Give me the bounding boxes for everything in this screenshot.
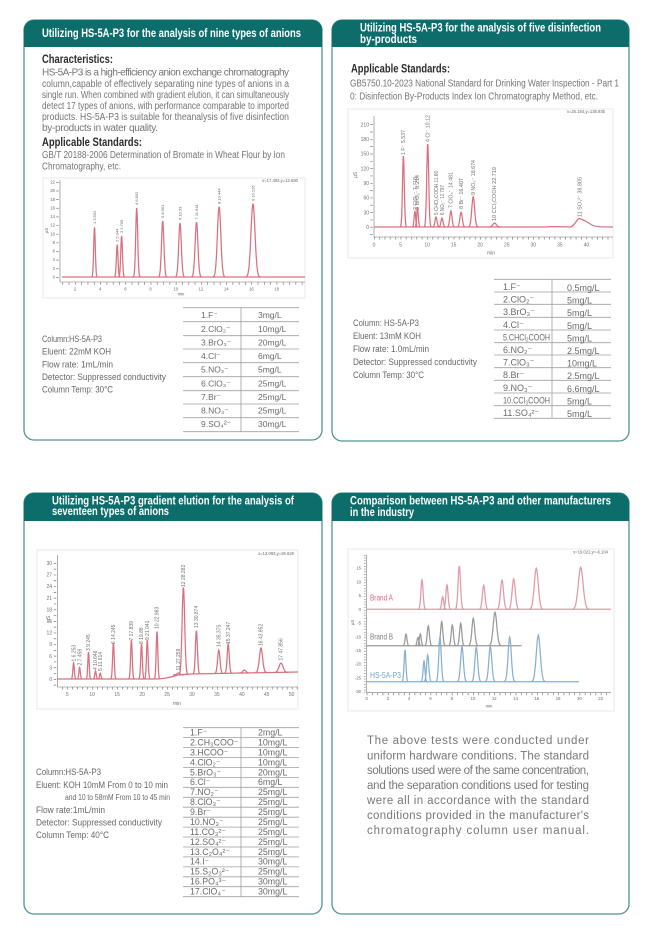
panel: manufacturer comparison	[332, 493, 629, 914]
table: seventeen anion concentrations: 10.NO₃⁻	[190, 817, 224, 827]
table: by-product concentrations: 8.Br⁻	[503, 370, 525, 380]
legend label: Brand A: Brand A	[370, 594, 394, 602]
text block: test conditions note: conditions provided in the manufacturer's	[367, 810, 589, 822]
table: seventeen anion concentrations: 10mg/L	[258, 747, 287, 757]
chart: seventeen anion chromatogram: 9 21.041	[145, 620, 151, 640]
text block: test conditions: Flow rate: 1.0mL/min	[353, 344, 429, 355]
table: seventeen anion concentrations: 6mg/L	[258, 777, 283, 787]
table: seventeen anion concentrations: 6.Cl⁻	[190, 777, 211, 787]
chart: disinfection by-product chromatogram: 0	[366, 225, 369, 231]
chart: disinfection by-product chromatogram: 15	[451, 242, 457, 248]
chart: seventeen anion chromatogram: 3 9.245	[86, 634, 92, 651]
chart: seventeen anion chromatogram: 12	[46, 631, 52, 637]
chart: brand comparison chromatograms: 2	[387, 696, 390, 701]
chart: seventeen anion chromatogram: 27	[46, 573, 52, 579]
chart: nine anion chromatogram: 3 5.709	[119, 219, 124, 233]
chart: brand comparison chromatograms: 20	[577, 696, 582, 701]
chart: disinfection by-product chromatogram: 20	[477, 242, 483, 248]
chart: brand comparison chromatograms: -25	[355, 676, 362, 680]
table: seventeen anion concentrations: 1.F⁻	[190, 728, 208, 738]
text block: characteristics description: by-products in water quality.	[42, 123, 158, 134]
panel header: gradient elution: Utilizing HS-5A-P3 gradient elution for the analysis of	[52, 496, 294, 508]
text block: test conditions note	[366, 735, 589, 837]
table: anion concentrations: 20mg/L	[258, 338, 287, 348]
chart: seventeen anion chromatogram: 10 22.983	[155, 607, 161, 629]
table: seventeen anion concentrations: 2.CH₃COO⁻	[190, 737, 239, 747]
text block: test conditions: Eluent: KOH 10mM From 0 to 10 min	[36, 780, 168, 791]
chart: disinfection by-product chromatogram	[348, 109, 613, 258]
table: seventeen anion concentrations: 30mg/L	[258, 877, 287, 887]
chart: disinfection by-product chromatogram: 10	[424, 242, 430, 248]
table: by-product concentrations: 5.CHCl₂COOH	[503, 332, 550, 342]
chart: nine anion chromatogram: 2	[74, 286, 77, 292]
chart: seventeen anion chromatogram: 18	[46, 607, 52, 613]
chart: disinfection by-product chromatogram: 7 ClO₃⁻ 14.481	[448, 172, 454, 208]
table: seventeen anion concentrations: 25mg/L	[258, 867, 287, 877]
text block: characteristics description: single run. When combined with gradient elution, it can simultaneously	[42, 90, 289, 101]
table: seventeen anion concentrations: 11.CO₃²⁻	[190, 827, 226, 837]
panel header: disinfection by-products: by-products	[360, 34, 417, 46]
panel header: gradient elution: seventeen types of anions	[52, 506, 169, 518]
chart: nine anion chromatogram: 10	[50, 231, 56, 236]
chart: nine anion chromatogram: 18	[274, 286, 280, 292]
chart: nine anion chromatogram: 8	[149, 286, 152, 292]
text block: standard reference	[350, 78, 619, 102]
chart: nine anion chromatogram: 8	[53, 240, 56, 245]
chart: disinfection by-product chromatogram: 90	[363, 181, 369, 187]
chart: brand comparison chromatograms: 18	[556, 696, 561, 701]
chart: brand comparison chromatograms: -30	[355, 689, 362, 694]
table: seventeen anion concentrations: 17.ClO₄⁻	[190, 887, 226, 897]
table: seventeen anion concentrations: 25mg/L	[258, 787, 287, 797]
chart: nine anion chromatogram: 12	[199, 286, 204, 292]
chart: disinfection by-product chromatogram: 5 CHCl₂COOH 11.66	[434, 171, 440, 215]
chart: seventeen anion chromatogram: 3	[49, 665, 52, 671]
table: seventeen anion concentrations: 15.S₂O₃²⁻	[190, 867, 230, 877]
panel header: gradient elution	[24, 493, 322, 521]
text block: test conditions: Eluent: 13mM KOH	[353, 331, 421, 342]
table: by-product concentrations: 5mg/L	[567, 321, 592, 331]
table: seventeen anion concentrations: 12.SO₄²⁻	[190, 837, 226, 847]
chart: brand comparison chromatograms: 22	[598, 696, 604, 701]
table: seventeen anion concentrations: 25mg/L	[258, 807, 287, 817]
text block: characteristics description: column,capable of effectively separating nine types of anions in a	[42, 79, 289, 90]
chart: seventeen anion chromatogram: 24	[46, 584, 52, 590]
text block: test conditions: Column Temp: 30°C	[353, 370, 424, 381]
table: seventeen anion concentrations: 14.I⁻	[190, 857, 210, 867]
table: by-product concentrations: 10mg/L	[567, 358, 597, 368]
chart: brand comparison chromatograms: µS	[350, 620, 355, 625]
chart: disinfection by-product chromatogram: 35	[557, 242, 563, 248]
table: anion concentrations: 25mg/L	[258, 406, 287, 416]
chart: disinfection by-product chromatogram: 60	[363, 196, 369, 202]
table: anion concentrations: 9.SO₄²⁻	[201, 419, 231, 429]
chart: disinfection by-product chromatogram: 180	[361, 137, 369, 143]
chart: brand comparison chromatograms: 0	[366, 696, 369, 701]
text block: test conditions note: were all in accordance with the standard	[366, 795, 589, 807]
chart: brand comparison chromatograms	[348, 549, 614, 711]
chart: brand comparison chromatograms: 15	[356, 566, 362, 571]
chart: nine anion chromatogram: 5 8.961	[160, 204, 165, 218]
chart: disinfection by-product chromatogram: 30	[531, 242, 536, 248]
table: seventeen anion concentrations: 10mg/L	[258, 737, 287, 747]
heading: applicable standards: Applicable Standards:	[42, 137, 142, 149]
chart: seventeen anion chromatogram: 9	[49, 642, 52, 648]
chart: nine anion chromatogram: 12	[50, 223, 56, 228]
table: by-product concentrations: 5mg/L	[567, 334, 592, 344]
table: seventeen anion concentrations: 25mg/L	[258, 797, 287, 807]
chart: seventeen anion chromatogram: 4 10.646	[93, 650, 99, 670]
chart: disinfection by-product chromatogram: 150	[361, 152, 369, 158]
chart: nine anion chromatogram: 6	[124, 286, 127, 292]
chart: brand comparison chromatograms: -10	[355, 634, 362, 639]
chart: brand comparison chromatograms: 10	[471, 696, 476, 701]
chart: seventeen anion chromatogram: 6	[49, 654, 52, 660]
chart: seventeen anion chromatogram: 30	[189, 692, 195, 698]
chart: nine anion chromatogram: 22	[50, 180, 56, 184]
trace: Brand A	[367, 566, 611, 609]
chart: nine anion chromatogram: 4	[99, 286, 102, 292]
table: seventeen anion concentrations: 4.ClO₂⁻	[190, 757, 221, 767]
panel header: comparison: in the industry	[350, 507, 414, 519]
text block: test conditions note: The above tests were conducted under	[367, 735, 589, 747]
table: by-product concentrations: 4.Cl⁻	[503, 320, 524, 330]
chart: disinfection by-product chromatogram: 1 F⁻ 5.537	[401, 130, 407, 155]
table: seventeen anion concentrations: 7.NO₂⁻	[190, 787, 219, 797]
chart: nine anion chromatogram: µS	[44, 228, 49, 233]
chart: nine anion chromatogram: 6 10.33	[178, 206, 182, 220]
chart: seventeen anion chromatogram: 5 11.614	[98, 652, 104, 671]
table: by-product concentrations: 0.5mg/L	[567, 283, 600, 293]
text block: test conditions	[353, 318, 477, 381]
table: by-product concentrations: 11.SO₄²⁻	[503, 408, 540, 418]
panel header: disinfection by-products: Utilizing HS-5A-P3 for the analysis of five disinfection	[360, 22, 601, 34]
chart: seventeen anion chromatogram: 8 19.88	[139, 627, 145, 644]
text block: test conditions: Eluent: 22mM KOH	[42, 346, 111, 358]
text block: test conditions: Flow rate: 1mL/min	[42, 360, 113, 370]
text block: test conditions: Column: HS-5A-P3	[353, 318, 419, 329]
chart: brand comparison chromatograms: 4	[408, 696, 411, 701]
table: by-product concentrations: 3.BrO₃⁻	[503, 307, 535, 317]
chart: seventeen anion chromatogram: 15	[114, 692, 120, 698]
text block: test conditions: Detector: Suppressed conductivity	[353, 357, 477, 368]
table: anion concentrations: 4.Cl⁻	[201, 351, 221, 361]
text block: test conditions: Flow rate:1mL/min	[36, 805, 105, 816]
chart: brand comparison chromatograms: x=19.022,y=-6.104	[573, 550, 609, 554]
chart: seventeen anion chromatogram: min	[173, 701, 181, 707]
table: seventeen anion concentrations: 9.Br⁻	[190, 807, 211, 817]
text block: test conditions note: and the separation conditions used for testing	[367, 780, 589, 792]
chart: seventeen anion chromatogram: 13 30.874	[194, 606, 200, 628]
text block: test conditions: Column Temp: 30°C	[42, 384, 113, 396]
table: seventeen anion concentrations: 30mg/L	[258, 857, 287, 867]
panel header: nine anions	[24, 20, 322, 47]
chart: seventeen anion chromatogram: 15	[46, 619, 52, 625]
chart: nine anion chromatogram: 16	[50, 205, 56, 210]
legend label: HS-5A-P3: HS-5A-P3	[370, 671, 401, 680]
text block: test conditions: Detector: Suppressed conductivity	[36, 818, 162, 828]
trace: Brand B	[367, 612, 522, 646]
chart: seventeen anion chromatogram: 1 6.253	[71, 645, 77, 662]
table: anion concentrations: 2.ClO₂⁻	[201, 324, 231, 334]
table: anion concentrations: 1.F⁻	[201, 310, 218, 320]
table: seventeen anion concentrations: 3.HCOO⁻	[190, 747, 229, 757]
chart: nine anion chromatogram: 0	[53, 274, 56, 280]
text block: test conditions	[36, 767, 170, 841]
table: by-product concentrations: 10.CCl₃COOH	[503, 396, 550, 406]
trace: HS-5A-P3	[367, 635, 579, 682]
table: seventeen anion concentrations: 20mg/L	[258, 767, 287, 777]
chart: seventeen anion chromatogram: 5	[66, 692, 69, 698]
chart: disinfection by-product chromatogram: 120	[361, 166, 369, 172]
chart: seventeen anion chromatogram: 21	[46, 596, 52, 602]
chart: seventeen anion chromatogram: 30	[46, 561, 52, 567]
chart: brand comparison chromatograms: -5	[357, 620, 362, 626]
chart: nine anion chromatogram: 14	[224, 286, 229, 292]
table: by-product concentrations: 2.5mg/L	[567, 346, 600, 356]
chart: disinfection by-product chromatogram: min	[487, 250, 495, 256]
chart: disinfection by-product chromatogram: 6 NO₂⁻ 12.797	[440, 185, 446, 215]
chart: disinfection by-product chromatogram: 8 Br⁻ 16.407	[459, 178, 465, 209]
chart: disinfection by-product chromatogram: 40	[584, 242, 589, 248]
panel header: comparison	[332, 493, 629, 521]
chart: seventeen anion chromatogram: 25	[164, 692, 170, 698]
text block: standard reference: 0: Disinfection By-Products Index Ion Chromatography Method, etc.	[350, 92, 598, 102]
text block: test conditions: Column:HS-5A-P3	[42, 334, 102, 345]
chart: nine anion chromatogram: 8 13.444	[216, 188, 222, 204]
table: seventeen anion concentrations: 8.ClO₃⁻	[190, 797, 221, 807]
table: seventeen anion concentrations: 13.C₂O₄²⁻	[190, 847, 230, 857]
table: anion concentrations: 25mg/L	[258, 378, 287, 388]
table: seventeen anion concentrations: 25mg/L	[258, 837, 287, 847]
text block: test conditions note: chromatography column user manual.	[367, 825, 589, 837]
chart: disinfection by-product chromatogram: 0	[373, 242, 376, 248]
chart: seventeen anion chromatogram: 12 28.282	[181, 565, 187, 587]
table: by-product concentrations: 5mg/L	[567, 296, 592, 306]
table: by-product concentrations: 6.NO₂⁻	[503, 345, 532, 355]
chart: nine anion chromatogram: 18	[50, 197, 56, 202]
chart: seventeen anion chromatogram: 14 35.375	[216, 625, 222, 647]
text block: characteristics description: detect 17 types of anions, with performance comparable to imported	[42, 101, 289, 112]
chart: brand comparison chromatograms: -20	[355, 662, 362, 667]
chart: disinfection by-product chromatogram: 25	[504, 242, 510, 248]
chart: seventeen anion chromatogram	[37, 550, 298, 709]
table: by-product concentrations: 2.ClO₂⁻	[503, 294, 534, 304]
table: by-product concentrations: 2.5mg/L	[567, 371, 600, 381]
text block: characteristics description: HS-5A-P3 is a high-efficiency anion exchange chromatography	[42, 68, 289, 78]
chart: seventeen anion chromatogram: 2 7.459	[77, 649, 83, 666]
chart: seventeen anion chromatogram: 35	[214, 692, 220, 698]
chart: seventeen anion chromatogram: x=12.093,y=26.626	[258, 551, 295, 556]
chart: nine anion chromatogram: 6	[53, 249, 56, 254]
table: by-product concentrations: 6.6mg/L	[567, 384, 600, 394]
chart: brand comparison chromatograms: -15	[355, 648, 362, 653]
table: anion concentrations: 8.NO₃⁻	[201, 406, 229, 416]
text block: standard reference: GB/T 20188-2006 Determination of Bromate in Wheat Flour by Ion	[42, 150, 285, 161]
chart: seventeen anion chromatogram: 10	[89, 692, 95, 698]
table: by-product concentrations	[494, 279, 611, 419]
chart: nine anion chromatogram: 14	[50, 214, 56, 219]
legend label: Brand B: Brand B	[370, 632, 393, 642]
chart: nine anion chromatogram: 9 16.126	[250, 185, 256, 201]
text block: test conditions note: uniform hardware conditions. The standard	[367, 750, 589, 762]
text block: test conditions: Column:HS-5A-P3	[36, 767, 101, 778]
table: seventeen anion concentrations: 30mg/L	[258, 887, 287, 897]
text block: characteristics description	[42, 68, 289, 134]
table: anion concentrations: 3.BrO₃⁻	[201, 338, 231, 348]
chart: seventeen anion chromatogram: 40	[239, 692, 245, 698]
chart: seventeen anion chromatogram: 16 43.852	[259, 624, 265, 646]
panel: seventeen types of anions	[24, 493, 322, 914]
table: anion concentrations	[183, 308, 299, 432]
chart: disinfection by-product chromatogram: 10 CCl₃COOH 22.719	[492, 167, 498, 221]
chart: seventeen anion chromatogram: 0	[49, 677, 52, 683]
table: seventeen anion concentrations: 5.BrO₃⁻	[190, 767, 222, 777]
chart: nine anion chromatogram: 20	[50, 188, 56, 193]
table: anion concentrations: 30mg/L	[258, 419, 287, 429]
table: by-product concentrations: 5mg/L	[567, 396, 592, 406]
chart: brand comparison chromatograms: 12	[492, 696, 497, 701]
chart: nine anion chromatogram: 4	[53, 257, 56, 262]
chart: nine anion chromatogram	[43, 178, 305, 298]
chart: nine anion chromatogram: min	[178, 292, 185, 296]
table: anion concentrations: 10mg/L	[258, 324, 287, 334]
chart: brand comparison chromatograms: 8	[451, 696, 454, 701]
chart: disinfection by-product chromatogram: x=25.154,y=138.935	[567, 109, 606, 114]
text block: test conditions	[42, 334, 166, 396]
chart: nine anion chromatogram: 2	[53, 266, 56, 271]
chart: disinfection by-product chromatogram: 2 ClO₂⁻ 7.718	[413, 177, 419, 210]
text block: standard reference: Chromatography, etc.	[42, 162, 121, 172]
panel header: nine anions: Utilizing HS-5A-P3 for the analysis of nine types of anions	[42, 28, 301, 40]
panel: five disinfection by-products	[332, 20, 629, 441]
table: seventeen anion concentrations: 10mg/L	[258, 757, 287, 767]
table: anion concentrations: 5mg/L	[258, 364, 282, 374]
chart: nine anion chromatogram: 4 6.892	[134, 191, 139, 205]
chart: brand comparison chromatograms: 5	[359, 593, 362, 598]
heading: applicable standards: Applicable Standards:	[351, 64, 450, 76]
chart: nine anion chromatogram: 10	[173, 286, 179, 292]
text block: standard reference	[42, 150, 285, 172]
chart: disinfection by-product chromatogram: 210	[361, 122, 369, 128]
text block: test conditions note: solutions used were of the same concentration,	[367, 765, 589, 777]
chart: brand comparison chromatograms: 6	[429, 696, 432, 701]
table: by-product concentrations: 5mg/L	[567, 308, 592, 318]
chart: nine anion chromatogram: x=17.493,y=13.690	[262, 178, 299, 183]
chart: brand comparison chromatograms: 14	[513, 696, 519, 701]
table: by-product concentrations: 1.F⁻	[503, 282, 521, 292]
table: seventeen anion concentrations: 16.PO₄³⁻	[190, 877, 226, 887]
table: seventeen anion concentrations: 25mg/L	[258, 817, 287, 827]
table: seventeen anion concentrations	[183, 728, 299, 897]
chart: seventeen anion chromatogram: 11 27.259	[176, 648, 182, 670]
table: anion concentrations: 7.Br⁻	[201, 392, 221, 402]
chart: seventeen anion chromatogram: 15 37.247	[226, 622, 232, 644]
table: seventeen anion concentrations: 25mg/L	[258, 827, 287, 837]
chart: disinfection by-product chromatogram: 4 Cl⁻ 10.12	[426, 115, 432, 142]
table: anion concentrations: 5.NO₂⁻	[201, 364, 229, 374]
table: anion concentrations: 3mg/L	[258, 310, 282, 320]
chart: seventeen anion chromatogram: 45	[264, 692, 270, 698]
chart: brand comparison chromatograms: 16	[534, 696, 540, 701]
chart: disinfection by-product chromatogram: µS	[353, 171, 359, 178]
chart: nine anion chromatogram: 7 11.641	[194, 203, 199, 220]
table: by-product concentrations: 5mg/L	[567, 409, 592, 419]
panel header: disinfection by-products	[332, 20, 629, 47]
text block: test conditions: Column Temp: 40°C	[36, 830, 109, 841]
chart: disinfection by-product chromatogram: 3 BrO₃⁻ 8.214	[415, 175, 421, 210]
chart: seventeen anion chromatogram: 7 17.839	[129, 621, 135, 640]
chart: brand comparison chromatograms: min	[486, 704, 493, 708]
table: anion concentrations: 6mg/L	[258, 351, 282, 361]
chart: disinfection by-product chromatogram: 9 NO₃⁻ 18.674	[471, 160, 477, 195]
text block: characteristics description: products. HS-5A-P3 is suitable for theanalysis of five disinfection	[42, 112, 289, 123]
chart: nine anion chromatogram: 16	[249, 286, 254, 292]
chart: seventeen anion chromatogram: 20	[139, 692, 145, 698]
heading: characteristics: Characteristics:	[42, 54, 113, 66]
table: seventeen anion concentrations: 2mg/L	[258, 728, 283, 738]
chart: seventeen anion chromatogram: µS	[46, 615, 52, 622]
chart: disinfection by-product chromatogram: 11 SO₄²⁻ 38.805	[578, 177, 584, 217]
chart: disinfection by-product chromatogram: 30	[363, 210, 369, 216]
chart: brand comparison chromatograms: 10	[356, 579, 362, 584]
chart: seventeen anion chromatogram: 17 47.856	[279, 638, 285, 660]
chart: seventeen anion chromatogram: 50	[289, 692, 295, 698]
table: seventeen anion concentrations: 25mg/L	[258, 847, 287, 857]
chart: nine anion chromatogram: 1 3.552	[92, 210, 97, 224]
table: by-product concentrations: 7.ClO₃⁻	[503, 358, 535, 368]
text block: test conditions: Detector: Suppressed conductivity	[42, 372, 166, 383]
text block: test conditions: and 10 to 58mM From 10 to 45 min	[65, 793, 170, 802]
chart: brand comparison chromatograms: 0	[359, 607, 362, 612]
table: anion concentrations: 6.ClO₃⁻	[201, 378, 231, 388]
chart: nine anion chromatogram: 2 5.344	[114, 228, 120, 242]
table: anion concentrations: 25mg/L	[258, 392, 287, 402]
table: by-product concentrations: 9.NO₃⁻	[503, 383, 533, 393]
chart: seventeen anion chromatogram: 6 14.245	[111, 624, 117, 644]
panel: nine types of anions	[24, 20, 322, 440]
chart: disinfection by-product chromatogram: 5	[399, 242, 402, 248]
